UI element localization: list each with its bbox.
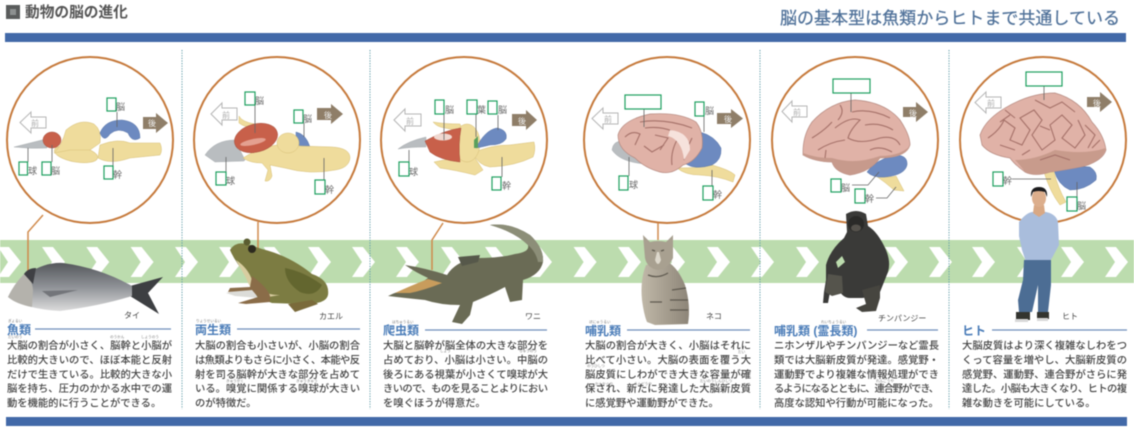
heading: 爬虫類: 爬虫類	[383, 322, 419, 338]
brain circle: fish: 前	[31, 118, 39, 128]
brain circle: amphibian: 脳	[255, 95, 264, 106]
text: primate: れんごうや	[876, 378, 894, 383]
text: fish: だけで生きている。比較的大きな小	[7, 368, 173, 381]
brain circle: amphibian	[194, 57, 360, 223]
brain circle: fish	[7, 57, 173, 223]
text: primate: 運動野でより複雑な情報処理ができ	[774, 368, 939, 381]
brain circle: reptile: 前	[406, 116, 414, 126]
brain circle: mammal: 球	[629, 179, 638, 190]
text: human: 達した。小脳も大きくなり、ヒトの複	[962, 382, 1128, 395]
brain circle: amphibian: 前	[222, 110, 230, 120]
brain circle: mammal: 脳	[705, 105, 714, 116]
brain circle: reptile: 脳	[445, 104, 454, 115]
text: human: 大脳皮質はより深く複雑なしわをつ	[962, 339, 1127, 352]
animal: crocodile	[388, 224, 543, 324]
text: human	[962, 339, 1128, 410]
heading: 魚類	[7, 318, 171, 337]
caption: ヒト: ヒト	[1062, 312, 1078, 321]
text: amphibian: 大脳の割合も小さいが、小脳の割合	[195, 339, 361, 352]
bottom blue bar	[6, 417, 1127, 426]
panel: human	[960, 57, 1128, 410]
text: primate: るようになるとともに、連合野ができ、	[774, 382, 939, 395]
brain circle: amphibian: 球	[226, 175, 235, 186]
panel: reptile	[381, 57, 548, 410]
text: mammal: うんどうや	[634, 381, 652, 386]
animal: chimpanzee	[823, 211, 889, 312]
dotted column dividers	[182, 50, 949, 409]
heading: 哺乳類	[585, 319, 750, 338]
text: amphibian	[195, 339, 361, 410]
text: mammal: だい	[738, 349, 746, 354]
text: human: 雑な動きを可能にしている。	[962, 396, 1096, 410]
panel: primate	[772, 57, 939, 410]
brain circle: primate: 幹	[865, 193, 874, 204]
text: fish: 大脳の割合が小さく、脳幹と小脳が	[7, 339, 173, 352]
caption: カエル: カエル	[319, 312, 343, 321]
text: amphibian: きゅうかく	[226, 378, 244, 383]
text: reptile	[383, 339, 548, 410]
panel: fish	[7, 57, 173, 410]
heading: 爬虫類	[383, 319, 547, 338]
text: mammal: 保され、新たに発達した大脳新皮質	[585, 382, 751, 395]
text: reptile: 占めており、小脳は小さい。中脳の	[383, 354, 548, 366]
text: fish: 比較的大きいので、ほぼ本能と反射	[7, 354, 172, 366]
brain circle: human: 前	[987, 98, 995, 108]
animal: frog	[226, 238, 328, 312]
text: reptile: 後ろにある視葉が小さくて嗅球が大	[383, 368, 548, 381]
text: reptile: しょう	[440, 348, 451, 353]
brain circle: amphibian: 後	[324, 110, 332, 120]
text: reptile: ちゅうのう	[519, 348, 537, 353]
caption: チンパンジー: チンパンジー	[878, 314, 926, 323]
brain circle: amphibian: 幹	[325, 184, 334, 195]
animal: cat	[642, 235, 689, 325]
brain circle: human	[960, 57, 1126, 223]
text: fish: だいのう	[8, 334, 22, 339]
brain circle: reptile	[381, 57, 547, 223]
text: fish: のうかん	[110, 334, 125, 339]
text: fish: しょうのう	[141, 334, 159, 339]
connector: fish	[28, 215, 43, 277]
heading: 哺乳類（霊長類）	[774, 319, 938, 338]
panel: amphibian	[194, 57, 361, 410]
heading: 両生類: りょうせいるい	[196, 318, 222, 323]
brain circle: reptile: 幹	[502, 180, 511, 191]
brain circle: fish: 幹	[113, 169, 122, 180]
text: mammal: 大脳の割合が大きく、小脳はそれに	[585, 339, 751, 352]
text: reptile: 大脳と脳幹が脳全体の大きな部分を	[383, 339, 548, 352]
connector: mammal	[657, 223, 659, 240]
brain circle: reptile: 葉	[477, 104, 486, 115]
brain circle: primate	[772, 57, 938, 223]
heading: 両生類	[195, 318, 360, 337]
text: mammal: だいのうしんひしつ	[700, 378, 733, 383]
brain circle: reptile: 脳	[498, 104, 507, 115]
brain circle: mammal	[584, 57, 750, 223]
text: amphibian: 射を司る脳幹が大きな部分を占めて	[195, 368, 360, 381]
text: primate: ニホンザルやチンパンジーなど霊長	[774, 340, 939, 352]
caption: ワニ: ワニ	[525, 312, 541, 321]
text: fish	[7, 334, 173, 410]
heading: 哺乳類（霊長類）: 哺乳類 (霊長類)	[774, 323, 857, 338]
text: mammal: に感覚野や運動野ができた。	[585, 396, 719, 410]
brain circle: reptile: 後	[518, 116, 526, 126]
text: primate	[774, 340, 939, 410]
text: amphibian: は魚類よりもさらに小さく、本能や反	[195, 354, 360, 366]
brain circle: human: 後	[1093, 98, 1101, 108]
text: mammal: 脳皮質にしわができ大きな容量が確	[585, 368, 751, 381]
heading: 魚類: ぎょるい	[8, 318, 23, 323]
panel: mammal	[584, 57, 751, 410]
text: amphibian: のが特徴だ。	[195, 396, 256, 410]
text: primate: 高度な認知や行動が可能になった。	[774, 396, 939, 410]
caption: ネコ: ネコ	[706, 312, 722, 321]
brain circle: mammal: 後	[724, 114, 732, 124]
brain circle: primate: 脳	[841, 182, 850, 193]
brain circle: mammal: 幹	[713, 189, 722, 200]
caption: タイ: タイ	[124, 311, 140, 320]
brain circle: fish: 脳	[51, 165, 60, 176]
brain circle: reptile: 球	[409, 166, 418, 177]
brain circle: mammal: 前	[604, 114, 612, 124]
top blue bar	[5, 33, 1126, 42]
heading: 爬虫類: はちゅうるい	[392, 319, 414, 324]
subtitle: 脳の基本型は魚類からヒトまで共通している	[780, 9, 1120, 28]
text: fish: 脳を持ち、圧力のかかる水中での運	[7, 382, 172, 395]
brain circle: amphibian: 脳	[303, 113, 312, 124]
title: 動物の脳の進化	[25, 3, 128, 21]
brain circle: human: 幹	[1003, 175, 1012, 186]
heading: 哺乳類: ほにゅうるい	[589, 319, 611, 324]
heading: 哺乳類（霊長類）: れいちょうるい	[821, 319, 847, 324]
text: fish: 動を機能的に行うことができる。	[7, 396, 161, 410]
text: human: くって容量を増やし、大脳新皮質の	[962, 354, 1127, 366]
brain circle: fish: 後	[148, 118, 156, 128]
brain circle: human: 脳	[1077, 200, 1086, 211]
brain circle: fish: 球	[28, 165, 37, 176]
brain circle: fish: 脳	[116, 101, 125, 112]
text: mammal: のうひしつ	[587, 363, 605, 368]
text: reptile: を嗅ぐほうが得意だ。	[383, 396, 486, 410]
text: mammal: かんかくや	[595, 381, 613, 386]
connector: amphibian	[257, 222, 259, 248]
text: amphibian: いる。嗅覚に関係する嗅球が大きい	[195, 382, 360, 395]
text: mammal	[585, 339, 751, 410]
text: mammal: 比べて小さい。大脳の表面を覆う大	[585, 354, 751, 366]
text: reptile: きいので、ものを見ることよりにおい	[383, 383, 548, 395]
text: human: 感覚野、運動野、連合野がさらに発	[962, 368, 1128, 381]
heading: 哺乳類: 哺乳類	[585, 323, 621, 338]
heading: 魚類: 魚類	[7, 322, 31, 337]
green evolution band with chevrons	[0, 240, 1134, 283]
animal: human	[1015, 187, 1059, 322]
brain circle: primate: 前	[793, 107, 801, 117]
connector: reptile	[432, 223, 443, 270]
heading: ヒト: ヒト	[962, 324, 986, 338]
heading: 両生類: 両生類	[195, 322, 231, 337]
brain circle: primate: 後	[909, 108, 917, 118]
animal: fish	[8, 263, 163, 314]
text: amphibian: きゅうきゅう	[296, 378, 318, 383]
text: primate: 類では大脳新皮質が発達。感覚野・	[774, 354, 939, 366]
